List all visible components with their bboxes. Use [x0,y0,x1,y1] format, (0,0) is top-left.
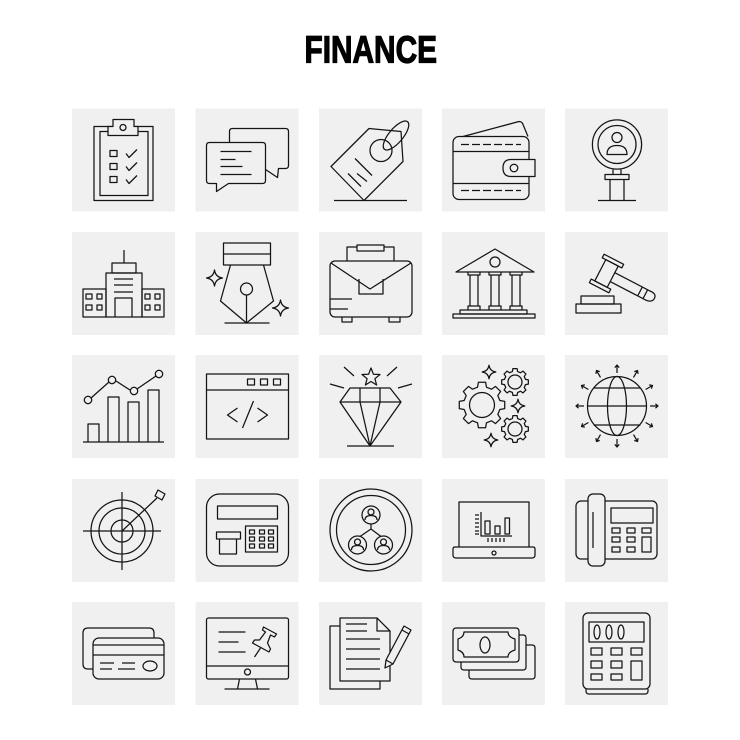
panel: ATM machine [196,479,298,582]
icon: target [83,490,165,570]
icon: bank [453,249,535,318]
icon: credit cards [83,628,164,679]
panel: banknotes [442,602,545,705]
icon: diamond [330,367,412,446]
icon: ATM machine [206,494,288,566]
title: FINANCE [304,30,437,72]
icon: monitor with pin [206,618,288,689]
icon: desk phone [576,494,657,566]
icon: chat bubbles [206,128,288,192]
icon: gears [459,365,528,447]
panel: globe [565,355,668,458]
icon: clipboard checklist [94,120,153,200]
panel: clipboard checklist [72,108,175,212]
icon: team network [330,489,412,571]
panel: diamond [319,355,422,458]
panel: calculator [565,602,668,705]
icon: globe [576,365,658,447]
panel: person search [565,108,668,212]
icon: person search [592,120,642,200]
panel: bank [442,232,545,335]
icon: briefcase [330,245,412,322]
icon: banknotes [453,628,535,679]
panel: monitor with pin [196,602,298,705]
panel: code window [196,355,298,458]
panel: office building [72,232,175,335]
panel: wallet [442,108,545,212]
icon: price tag [331,117,413,200]
icon: documents and pencil [330,618,411,689]
panel: briefcase [319,232,422,335]
panel: laptop chart [442,479,545,582]
panel: bar chart [72,355,175,458]
panel: gears [442,355,545,458]
panel: credit cards [72,602,175,705]
icon: wallet [453,122,535,200]
icon: pen nib [206,243,288,323]
icon: office building [83,250,164,317]
icon: gavel [576,254,662,313]
icon: calculator [583,613,650,694]
icon: code window [206,374,288,439]
panel: gavel [565,232,668,335]
icon: bar chart [83,370,164,442]
panel: desk phone [565,479,668,582]
panel: target [72,479,175,582]
icon: laptop chart [453,502,535,558]
panel: price tag [319,108,422,212]
panel: pen nib [196,232,298,335]
panel: chat bubbles [196,108,298,212]
panel: documents and pencil [319,602,422,705]
panel: team network [319,479,422,582]
